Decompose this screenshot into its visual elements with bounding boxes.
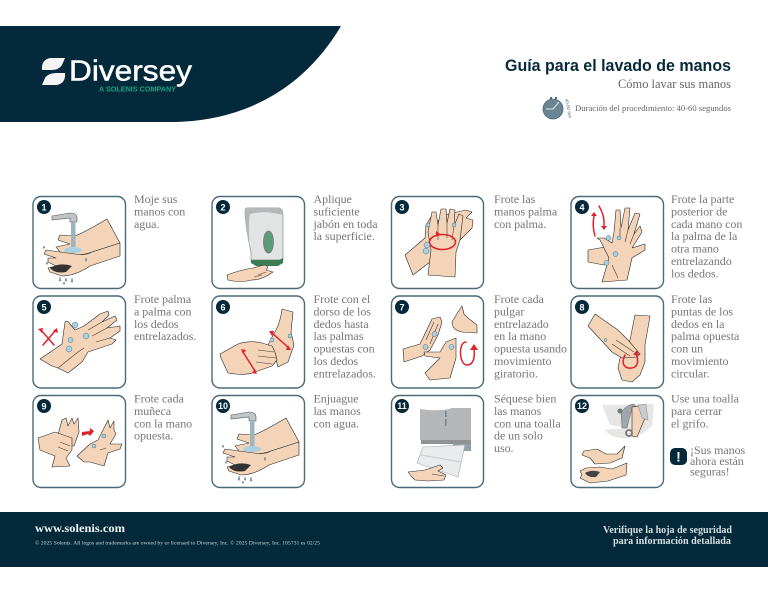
- illustration: soap dispenser and hand: [227, 208, 283, 282]
- instruction text: Use una toalla: [671, 392, 740, 406]
- footer band: [0, 512, 768, 567]
- instruction text: Frote palma: [134, 292, 192, 306]
- step badge: 6: [220, 302, 226, 312]
- panel: step 1: [33, 192, 185, 288]
- card frame: [212, 396, 304, 488]
- card frame: [392, 296, 484, 388]
- instruction text: pulgar: [494, 304, 524, 318]
- illustration: rinsing hands: [222, 412, 299, 483]
- procedure duration: Duración del procedimiento: 40-60 segundos: [575, 103, 731, 113]
- instruction text: Frote la parte: [671, 192, 734, 206]
- instruction text: entrelazando: [671, 254, 732, 268]
- Diversey wordmark: Diversey: [69, 56, 193, 88]
- instruction text: Séquese bien: [494, 392, 556, 406]
- safe hands message: ahora están: [690, 454, 744, 468]
- subtitle: Cómo lavar sus manos: [618, 76, 731, 91]
- title: Guía para el lavado de manos: [505, 57, 731, 75]
- safety sheet note: Verifique la hoja de seguridad: [603, 525, 732, 536]
- safe hands message: seguras!: [690, 464, 730, 478]
- card frame: [571, 196, 664, 288]
- safety sheet note: para información detallada: [613, 536, 731, 547]
- header band with logo: [0, 26, 341, 122]
- panel: step 11: [392, 392, 561, 488]
- instruction text: uso.: [494, 441, 514, 455]
- illustration: thumb rubbing: [403, 306, 478, 380]
- illustration: palm to palm rubbing: [405, 209, 473, 277]
- instruction text: entrelazados.: [134, 329, 196, 343]
- instruction text: Frote con el: [314, 292, 371, 306]
- panel: step 2: [212, 192, 378, 288]
- instruction text: otra mano: [671, 242, 719, 256]
- instruction text: con la mano: [134, 416, 192, 430]
- instruction text: la superficie.: [314, 229, 375, 243]
- instruction text: circular.: [671, 366, 710, 380]
- instruction text: con un: [671, 342, 703, 356]
- instruction text: manos con: [134, 204, 185, 218]
- instruction text: los dedos: [134, 317, 179, 331]
- instruction text: con una toalla: [494, 416, 561, 430]
- instruction text: jabón en toda: [312, 217, 378, 231]
- illustration: back of hand rubbing: [588, 206, 645, 282]
- instruction text: movimiento: [671, 354, 729, 368]
- website: www.solenis.com: [35, 521, 125, 535]
- panel: step 10: [212, 392, 361, 488]
- icon: timer: 40-60 sec: [564, 98, 573, 119]
- instruction text: cada mano con: [671, 217, 742, 231]
- card frame: [392, 196, 484, 288]
- card frame: [33, 396, 126, 488]
- icon: alert: !: [676, 448, 681, 464]
- step badge: 2: [220, 202, 226, 212]
- instruction text: los dedos: [314, 354, 358, 368]
- step badge: [216, 300, 230, 314]
- step badge: [395, 200, 409, 214]
- step badge: 11: [397, 401, 407, 411]
- instruction text: Enjuague: [314, 392, 358, 406]
- step badge: 3: [399, 202, 405, 212]
- safe hands message: ¡Sus manos: [690, 443, 746, 457]
- panel: step 12: [571, 392, 746, 488]
- illustration: rubbing wrists: [38, 418, 122, 467]
- step badge: 4: [579, 202, 585, 212]
- instruction text: el grifo.: [671, 416, 709, 430]
- icon: alert: [670, 448, 687, 465]
- card frame: [392, 396, 484, 488]
- panel: step 5: [33, 292, 196, 388]
- step badge: [37, 300, 51, 314]
- panel: step 9: [33, 392, 192, 488]
- instruction text: con agua.: [314, 416, 359, 430]
- instruction text: con palma.: [494, 217, 546, 231]
- illustration: closing tap with towel: [580, 404, 654, 483]
- instruction text: dedos hasta: [314, 317, 369, 331]
- instruction text: opuestas con: [314, 342, 375, 356]
- instruction text: dorso de los: [314, 304, 371, 318]
- instruction text: Moje sus: [134, 192, 178, 206]
- instruction text: puntas de los: [671, 304, 733, 318]
- instruction text: Frote cada: [134, 392, 185, 406]
- instruction text: manos palma: [494, 204, 558, 218]
- panel: step 6: [212, 292, 376, 388]
- instruction text: movimiento: [494, 354, 552, 368]
- illustration: interlaced fingers: [38, 311, 120, 373]
- illustration: fingertips in palm: [588, 314, 650, 382]
- step badge: [216, 399, 230, 413]
- step badge: 12: [577, 401, 587, 411]
- instruction text: giratorio.: [494, 366, 538, 380]
- card frame: [212, 196, 304, 288]
- step badge: [37, 399, 51, 413]
- step badge: 7: [399, 302, 405, 312]
- instruction text: entrelazados.: [314, 366, 376, 380]
- panel: step 3: [392, 192, 558, 288]
- instruction text: Frote las: [494, 192, 536, 206]
- instruction text: opuesta.: [134, 429, 173, 443]
- legal copyright: © 2025 Solenis. All logos and trademarks are owned by or licensed to Diversey, Inc. © 2025 Diversey, Inc. 105731 es 02/25: [35, 540, 320, 546]
- instruction text: Aplique: [314, 192, 352, 206]
- step badge: 5: [41, 302, 47, 312]
- icon: Diversey leaf logo: [42, 58, 65, 85]
- instruction text: a palma con: [134, 304, 191, 318]
- instruction text: los dedos.: [671, 266, 719, 280]
- instruction text: las manos: [494, 404, 542, 418]
- instruction text: muñeca: [134, 404, 172, 418]
- card frame: [33, 296, 126, 388]
- instruction text: opuesta usando: [494, 342, 567, 356]
- instruction text: la palma de la: [671, 229, 738, 243]
- instruction text: posterior de: [671, 204, 727, 218]
- icon: timer: [543, 97, 573, 119]
- step badge: 1: [41, 202, 47, 212]
- instruction text: Frote cada: [494, 292, 545, 306]
- panel: step 8: [571, 292, 740, 388]
- step badge: [395, 399, 409, 413]
- step badge: [37, 200, 51, 214]
- instruction text: para cerrar: [671, 404, 722, 418]
- card frame: [571, 396, 664, 488]
- instruction text: agua.: [134, 217, 159, 231]
- card frame: [33, 196, 126, 288]
- instruction text: entrelazado: [494, 317, 549, 331]
- panel: step 4: [571, 192, 742, 288]
- step badge: [575, 399, 589, 413]
- instruction text: Frote las: [671, 292, 713, 306]
- panel: step 7: [392, 292, 567, 388]
- step badge: 9: [41, 401, 47, 411]
- card frame: [571, 296, 664, 388]
- instruction text: las manos: [314, 404, 361, 418]
- step badge: 10: [218, 401, 228, 411]
- illustration: paper towel dispenser: [408, 408, 471, 481]
- instruction text: suficiente: [314, 204, 360, 218]
- instruction text: dedos en la: [671, 317, 725, 331]
- step badge: [216, 200, 230, 214]
- card frame: [212, 296, 304, 388]
- step badge: [575, 300, 589, 314]
- instruction text: las palmas: [314, 329, 364, 343]
- illustration: backs of fingers against palms: [220, 309, 294, 374]
- illustration: wetting hands under tap: [43, 213, 120, 284]
- step badge: 8: [579, 302, 585, 312]
- step badge: [575, 200, 589, 214]
- step badge: [395, 300, 409, 314]
- logo tagline: A SOLENIS COMPANY: [99, 86, 176, 94]
- instruction text: de un solo: [494, 429, 543, 443]
- instruction text: palma opuesta: [671, 329, 740, 343]
- instruction text: en la mano: [494, 329, 546, 343]
